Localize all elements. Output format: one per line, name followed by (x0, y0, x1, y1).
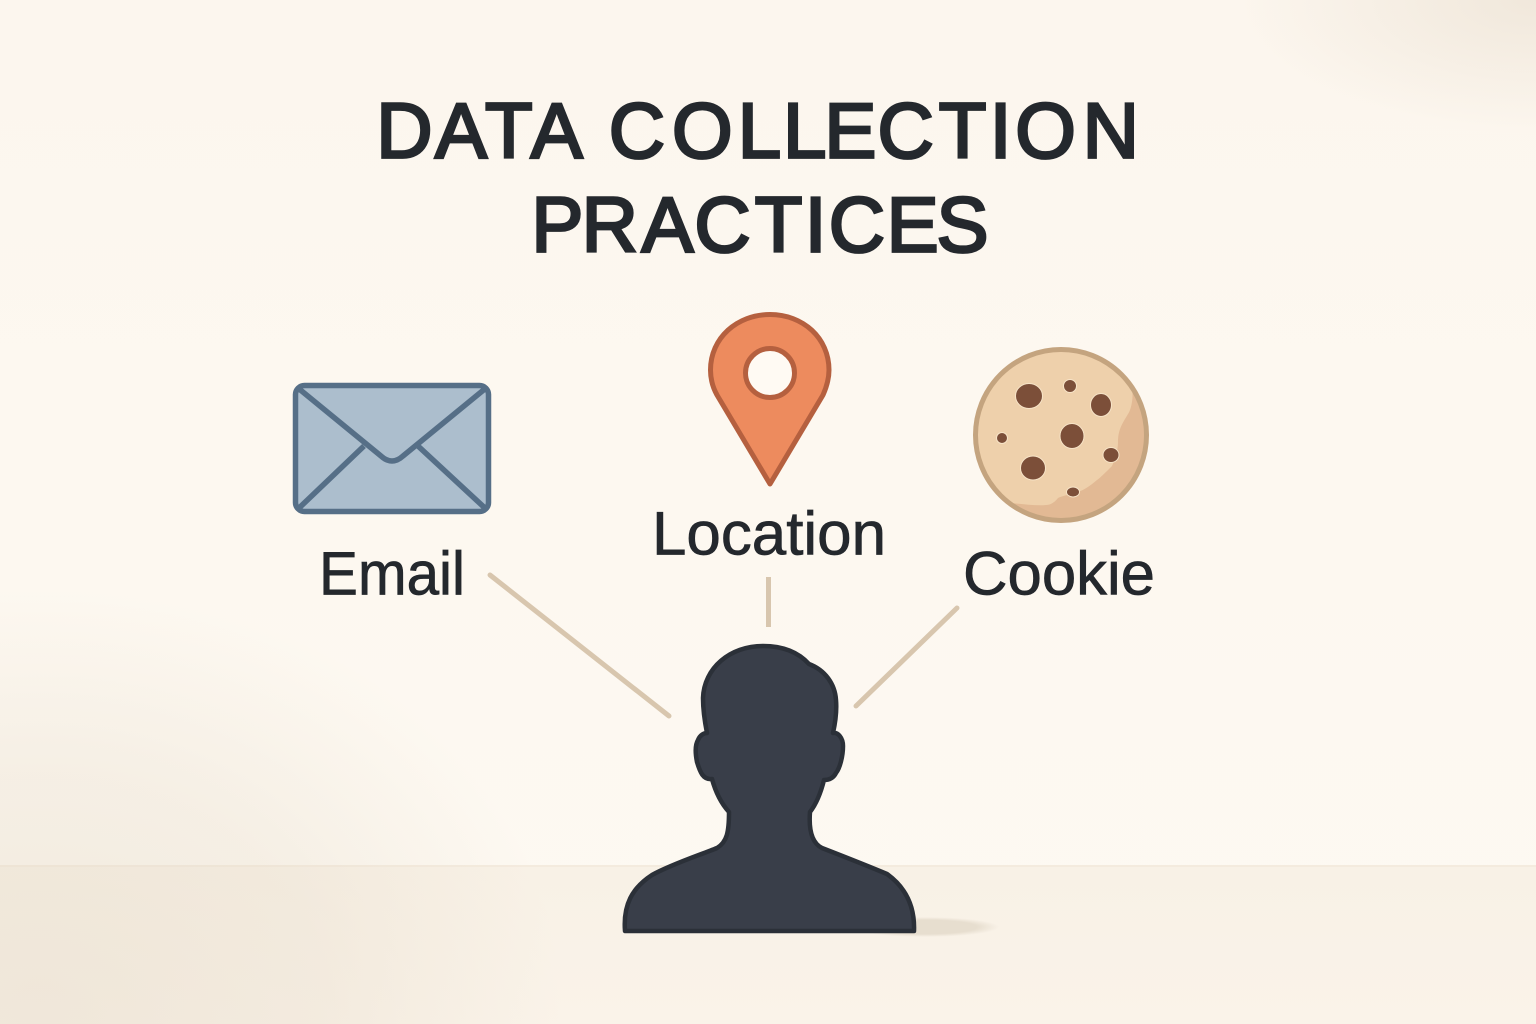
icon: email envelope (296, 386, 488, 512)
icon: cookie (976, 350, 1146, 520)
title: COLLECTION (609, 87, 1139, 175)
ground shadow (851, 917, 999, 937)
title (376, 87, 1139, 268)
connector: location to person (766, 577, 771, 627)
label: Email: Email (319, 540, 465, 608)
icon: location pin (710, 314, 829, 484)
label: Location: Location (652, 500, 886, 568)
icon: person silhouette (625, 646, 914, 931)
title: DATA (376, 87, 583, 175)
label: Cookie: Cookie (963, 540, 1155, 608)
title: PRACTICES (531, 180, 989, 268)
connector: email to person (490, 575, 669, 716)
connector: cookie to person (856, 608, 957, 706)
